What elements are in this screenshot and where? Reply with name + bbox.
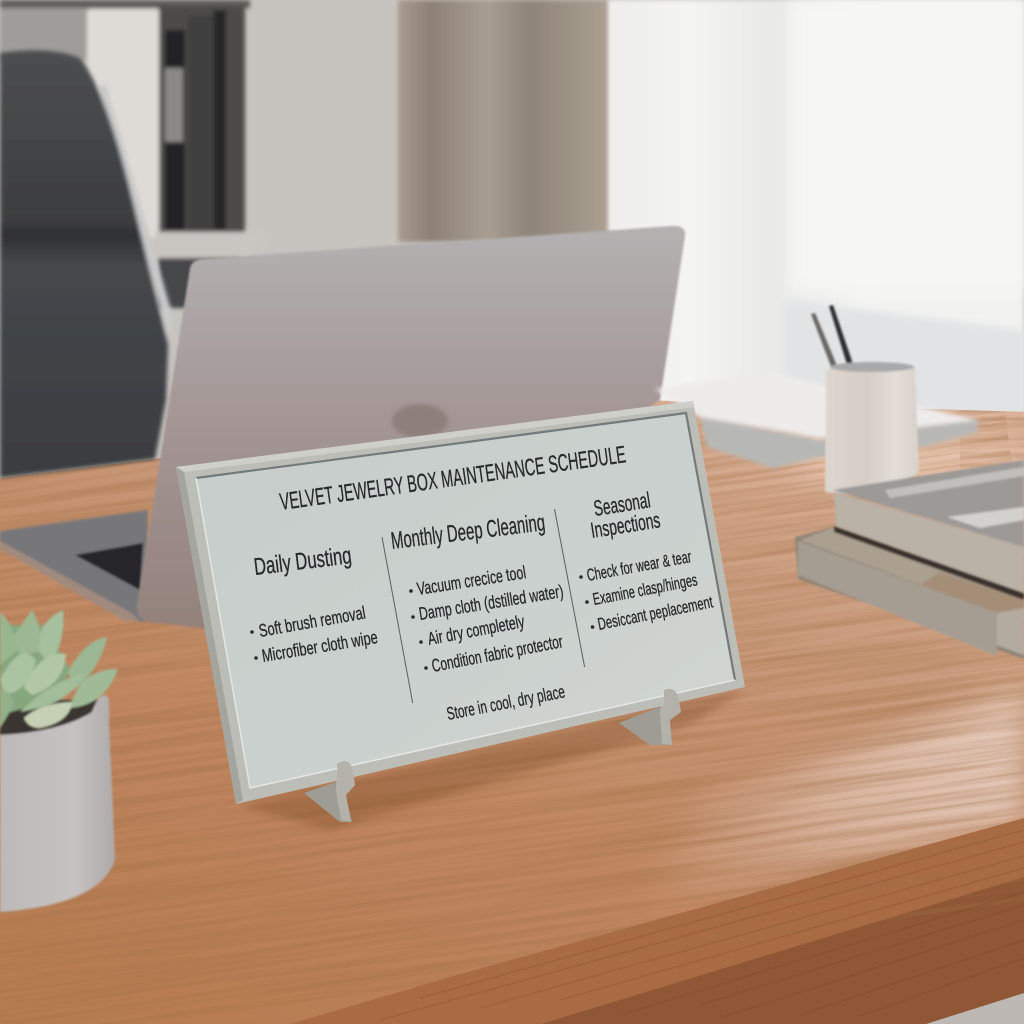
column heading: monthly: Monthly Deep Cleaning [389, 509, 547, 555]
title: VELVET JEWELRY BOX MAINTENANCE SCHEDULE [278, 441, 628, 516]
soil [0, 700, 100, 738]
column heading: seasonal [589, 487, 662, 543]
seasonal list: Examine clasp/hinges [591, 570, 699, 609]
monthly list: Vacuum crecice tool [416, 562, 527, 599]
office chair [0, 50, 174, 478]
monthly list: Air dry completely [426, 611, 526, 649]
top book pages [834, 492, 1024, 593]
shadow of sign on desk [240, 690, 745, 830]
sign text [250, 441, 715, 724]
column heading: seasonal: Seasonal [592, 487, 652, 521]
column heading: daily: Daily Dusting [252, 542, 353, 581]
bottom book [795, 527, 1024, 659]
background: room wall, shelf, curtain and window [0, 0, 1024, 530]
lid logo [392, 404, 448, 438]
stand clips over frame [337, 689, 681, 793]
floor corner [926, 993, 1024, 1024]
leaves [0, 610, 118, 728]
desk surface and front edge [0, 400, 1024, 1024]
daily list: Microfiber cloth wipe [260, 627, 379, 666]
seasonal list [579, 547, 715, 634]
closed notebook behind sign [655, 372, 978, 468]
monthly list: Damp cloth (dstilled water) [417, 581, 565, 624]
column dividers [382, 509, 585, 703]
pencils [811, 313, 838, 369]
potted succulent [0, 610, 118, 912]
foot: left stand [304, 761, 355, 822]
sign frame [176, 401, 745, 804]
seasonal list: Check for wear & tear [585, 547, 693, 585]
wood grain [0, 403, 1024, 1024]
foot: right stand [619, 689, 681, 745]
stacked books [795, 460, 1024, 659]
sheen near front corner [678, 684, 1024, 890]
daily list [250, 602, 379, 666]
seasonal list: Desiccant peplacement [596, 592, 715, 634]
column heading: seasonal: Inspections [589, 507, 662, 543]
laptop lid [137, 226, 685, 640]
pot [0, 695, 115, 912]
top book cover [833, 460, 1024, 547]
book title ghost [885, 467, 1024, 498]
monthly list [409, 562, 565, 676]
laptop base and keyboard [0, 510, 148, 622]
daily list: Soft brush removal [257, 602, 367, 641]
laptop [0, 226, 685, 640]
footer note: Store in cool, dry place [445, 681, 567, 724]
cup [825, 365, 919, 494]
pencil cup with pencils [811, 305, 919, 494]
sign panel [196, 413, 735, 788]
monthly list: Condition fabric protector [430, 631, 564, 676]
wood grain: far right patch [960, 408, 1024, 468]
